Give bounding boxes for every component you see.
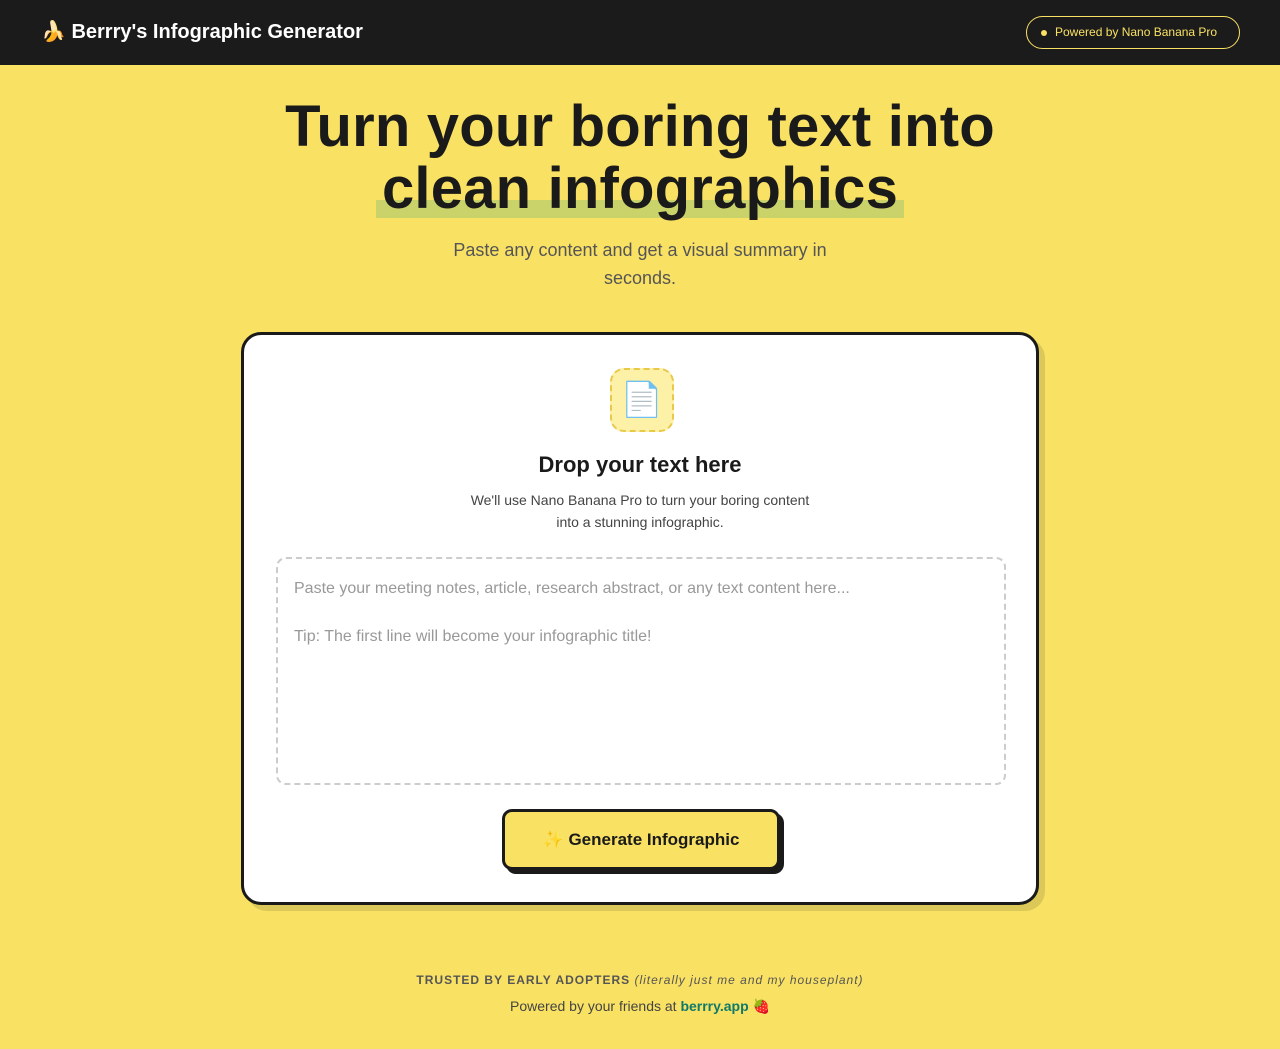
textarea: Tip: The first line will become your infographic title!: [294, 628, 651, 645]
card description: [470, 492, 810, 530]
button: ✨ Generate Infographic: [543, 830, 739, 849]
footer trusted: TRUSTED BY EARLY ADOPTERS (literally just me and my houseplant): [416, 973, 864, 987]
panel: input card: [241, 332, 1039, 905]
card description: into a stunning infographic.: [556, 514, 724, 530]
subtitle: Paste any content and get a visual summary in seconds.: [453, 240, 827, 288]
textarea: Paste your meeting notes, article, research abstract, or any text content here...: [294, 580, 850, 597]
icon: document: [610, 368, 674, 432]
powered pill: Powered by Nano Banana Pro: [1055, 25, 1217, 39]
title: Turn your boring text into: [285, 94, 995, 159]
title: clean infographics: [382, 156, 898, 221]
button: [502, 809, 780, 870]
nav bar: [0, 0, 1280, 65]
icon: document: 📄: [621, 381, 663, 419]
powered pill: [1026, 16, 1240, 49]
card description: We'll use Nano Banana Pro to turn your boring content: [471, 492, 809, 508]
textarea: [276, 557, 1006, 785]
card heading: Drop your text here: [539, 452, 741, 477]
title: [285, 94, 995, 221]
footer powered: Powered by your friends at berrry.app 🍓: [510, 998, 770, 1014]
brand: 🍌 Berrry's Infographic Generator: [41, 21, 363, 43]
